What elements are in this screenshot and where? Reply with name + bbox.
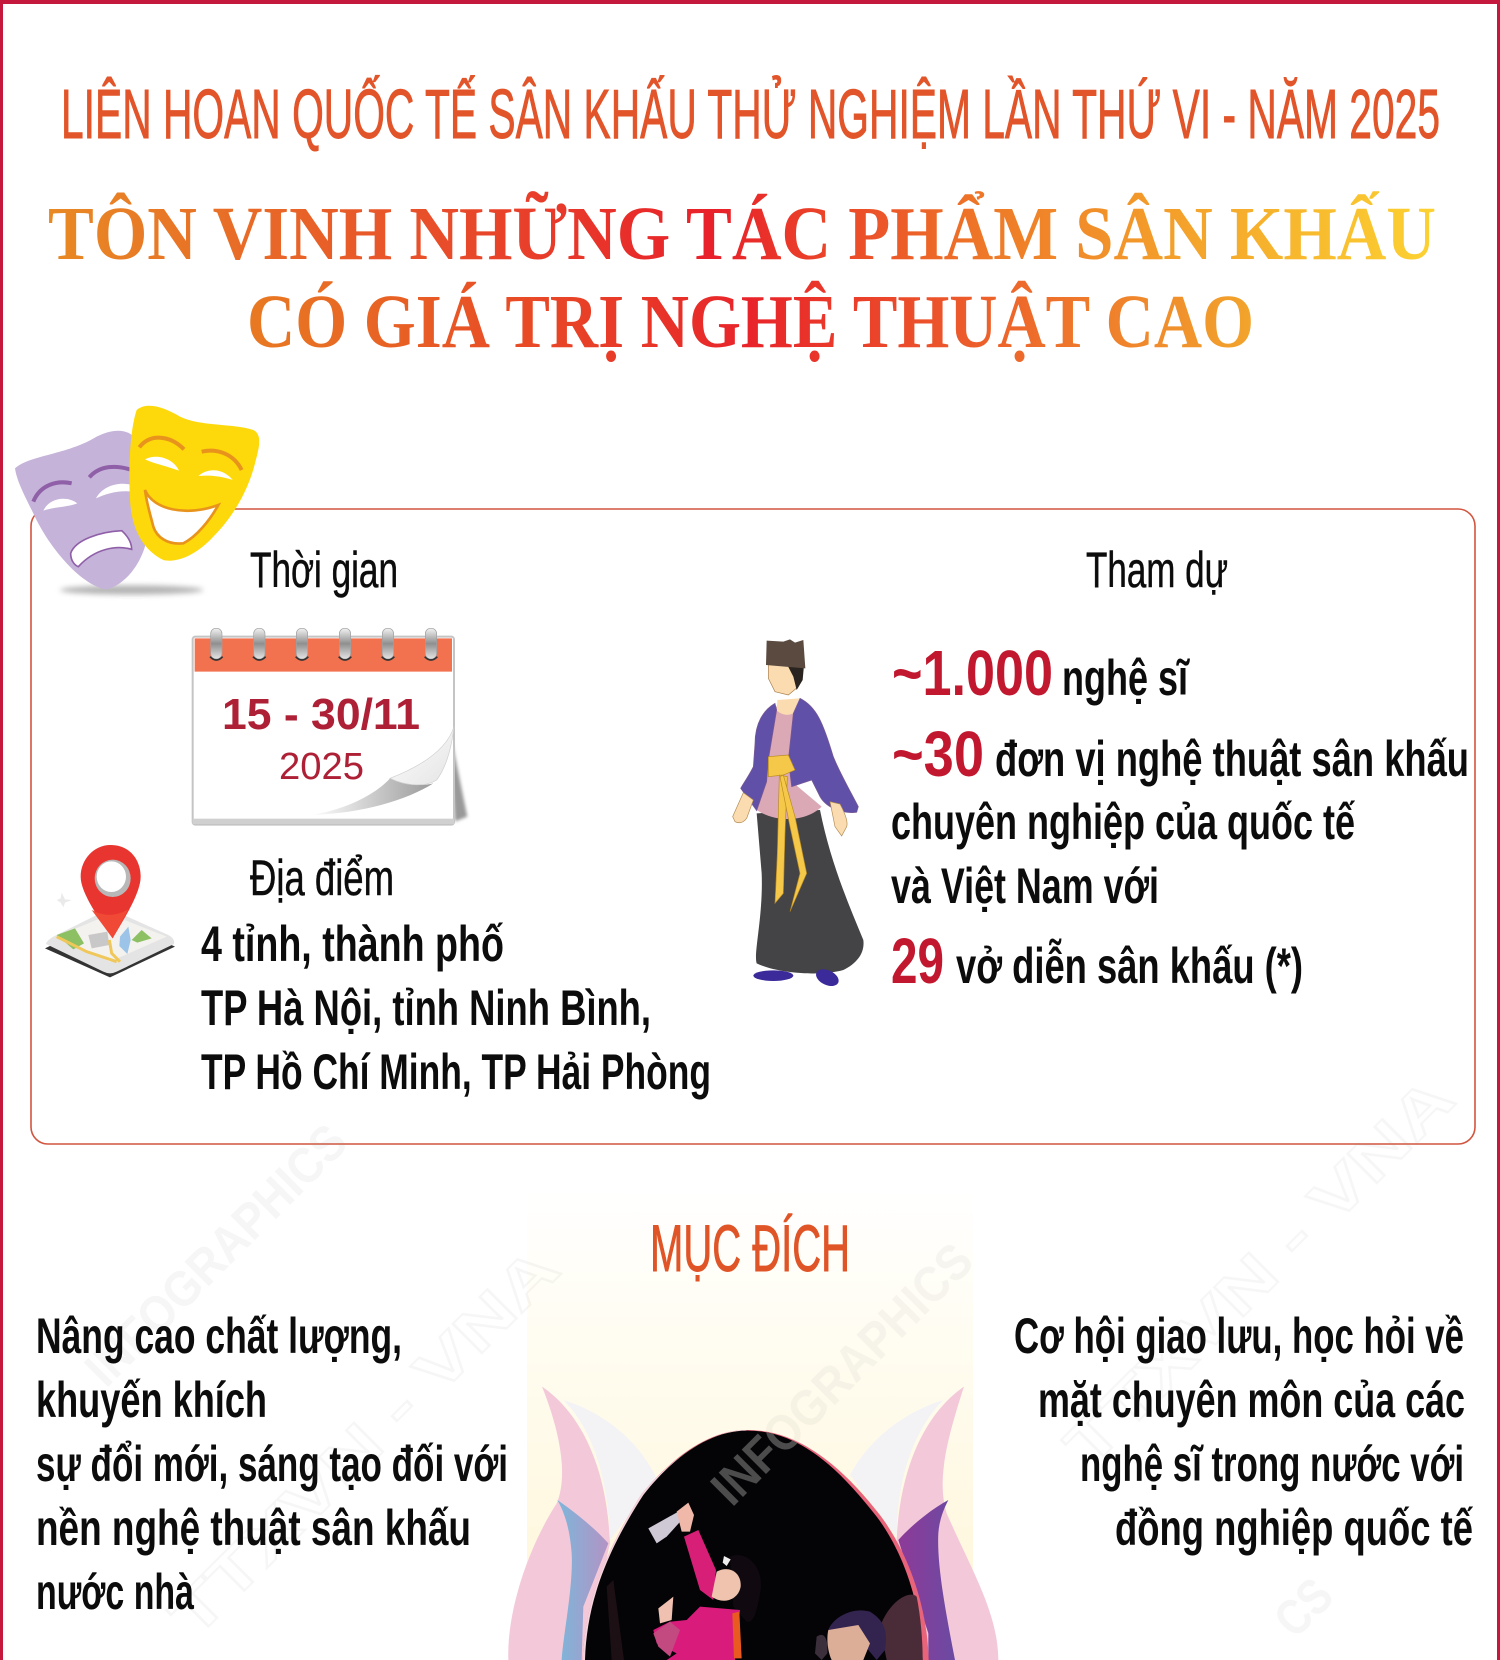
heading: main title: CÓ GIÁ TRỊ NGHỆ THUẬT CAO (247, 280, 1254, 364)
text: participant figures: nghệ sĩ (1062, 650, 1190, 706)
text: participant figures: ~1.000 (892, 637, 1053, 709)
icon: theatre masks (15, 406, 259, 595)
icon: calendar with date (193, 628, 467, 825)
icon: calendar with date: 15 - 30/11 (222, 690, 420, 739)
watermarks: CS (1263, 1567, 1344, 1648)
watermarks: INFOGRAPHICS (74, 1113, 358, 1397)
panel: information box (31, 509, 1475, 1144)
text: participant figures (891, 637, 1469, 997)
heading: purpose: MỤC ĐÍCH (650, 1211, 850, 1285)
text: purpose left: nền nghệ thuật sân khấu (36, 1500, 471, 1556)
watermarks: TTXVN - VNA (157, 1234, 572, 1649)
text: participant figures: ~30 (892, 718, 984, 790)
illustration: lotus with stage photo (508, 1386, 998, 1660)
text: purpose right (1014, 1308, 1473, 1556)
label: venue: Địa điểm (250, 850, 394, 906)
text: purpose left: sự đổi mới, sáng tạo đối với (36, 1436, 508, 1492)
text: participant figures: 29 (891, 925, 944, 997)
text: participant figures: và Việt Nam với (891, 858, 1159, 914)
label: time: Thời gian (250, 542, 398, 598)
text: purpose left: khuyến khích (36, 1372, 267, 1428)
text: participant figures: vở diễn sân khấu (*) (956, 938, 1303, 994)
text: venue list (201, 916, 711, 1100)
icon: chèo costume figure (733, 639, 864, 989)
text: venue list: TP Hà Nội, tỉnh Ninh Bình, (201, 980, 651, 1036)
text: purpose left: Nâng cao chất lượng, (36, 1308, 402, 1364)
watermarks (74, 1064, 1467, 1649)
icon: map pin (45, 845, 175, 977)
label: participants: Tham dự (1086, 542, 1228, 598)
text: venue list: 4 tỉnh, thành phố (201, 916, 504, 972)
icon: calendar with date: 2025 (279, 746, 364, 788)
text: purpose left (36, 1308, 508, 1620)
text: purpose left: nước nhà (36, 1564, 194, 1620)
heading: main title (48, 191, 1436, 364)
illustration: lotus with stage photo: INFOGRAPHICS (700, 1232, 984, 1516)
panel: purpose background (527, 1190, 973, 1590)
watermarks: INFOGRAPHICS (700, 1232, 984, 1516)
watermarks: TTXVN - VNA (1052, 1064, 1467, 1479)
text: venue list: TP Hồ Chí Minh, TP Hải Phòng (201, 1044, 711, 1100)
